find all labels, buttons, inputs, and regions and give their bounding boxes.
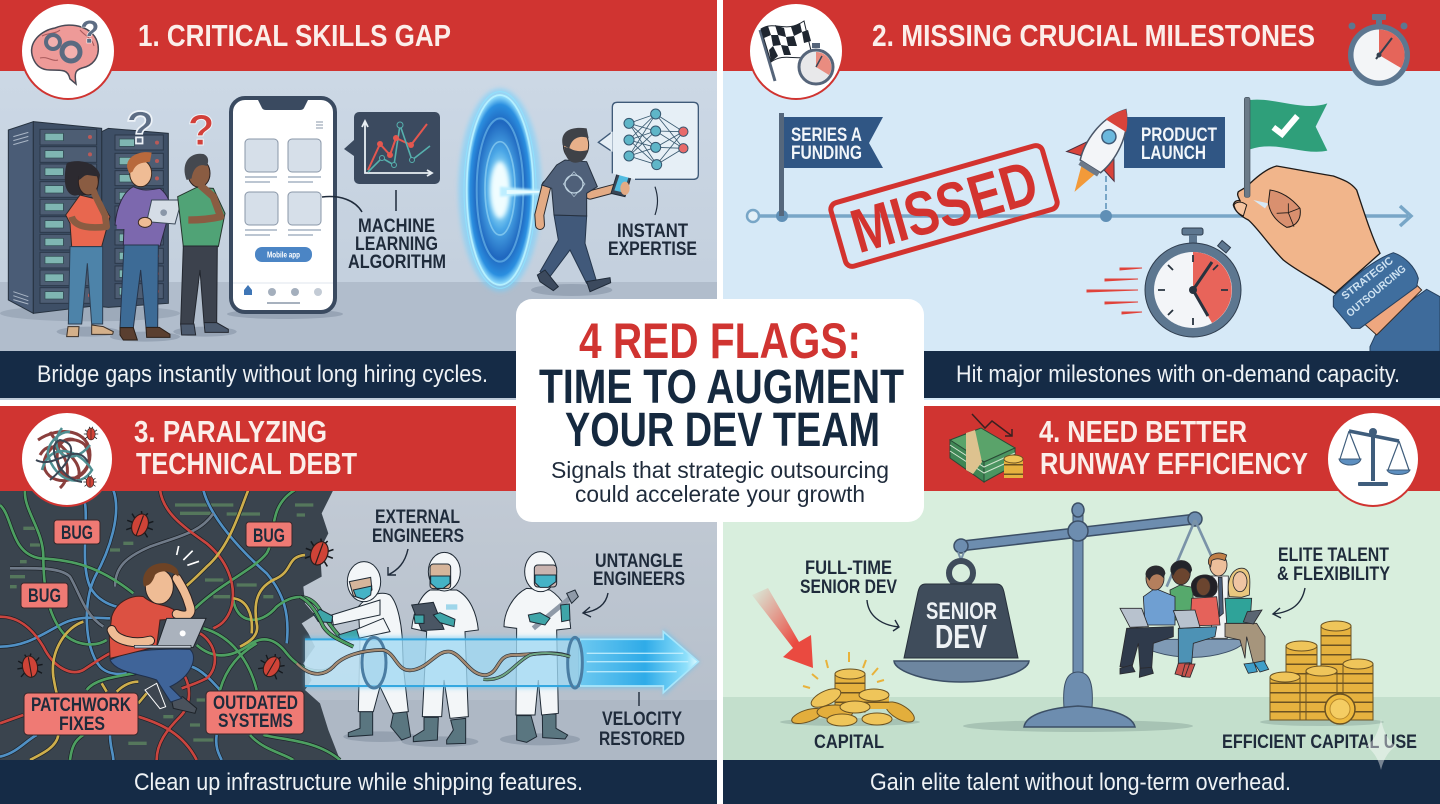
wires	[0, 490, 340, 760]
caption bar 4: Gain elite talent without long-term overhead.	[870, 769, 1291, 796]
coins: capital	[780, 652, 920, 727]
panel: runway efficiency	[723, 406, 1440, 804]
scene: racks and team	[0, 101, 237, 342]
phone mockup	[227, 98, 343, 319]
right pan with team	[1120, 520, 1269, 677]
heading 2: 2. MISSING CRUCIAL MILESTONES	[872, 18, 1315, 53]
arrow: red downward	[752, 588, 813, 668]
label: machine learning algorithm	[348, 216, 446, 273]
weight: senior dev	[894, 552, 1029, 682]
label: instant expertise	[608, 221, 697, 260]
center title card	[516, 299, 924, 522]
label: bug 1	[54, 520, 100, 544]
flag: product launch	[1124, 117, 1225, 168]
title line: red flags: 4 RED FLAGS:	[579, 313, 861, 369]
caption bar 2	[723, 351, 1440, 398]
neural network bubble	[598, 102, 698, 179]
label: bug 3: BUG	[28, 586, 61, 607]
flag: series a funding	[779, 113, 883, 216]
flag: series a funding: FUNDING	[791, 143, 862, 164]
heading 3	[134, 414, 357, 481]
caption bar 4	[723, 760, 1440, 804]
person: man in green	[173, 154, 237, 337]
flag: green check	[1250, 100, 1327, 152]
label: full-time senior dev: FULL-TIME	[805, 558, 892, 579]
label: machine learning algorithm: ALGORITHM	[348, 252, 446, 273]
heading 3: 3. PARALYZING	[134, 414, 327, 449]
arrow: untangle engineers	[583, 593, 608, 617]
label: elite talent and flexibility: & FLEXIBILITY	[1277, 564, 1390, 585]
header band 2	[723, 0, 1440, 71]
balance scale	[954, 503, 1202, 732]
label: outdated systems: OUTDATED	[213, 693, 298, 714]
label: patchwork fixes: PATCHWORK	[31, 695, 131, 716]
scene: flag and hand	[1233, 97, 1440, 351]
caption bar 1: Bridge gaps instantly without long hiring cycles.	[37, 361, 488, 388]
hand with wristband	[1233, 97, 1440, 351]
button: mobile app	[255, 247, 312, 262]
panel: paralyzing technical debt	[0, 406, 717, 804]
label: elite talent and flexibility	[1277, 545, 1390, 585]
label: external engineers: ENGINEERS	[372, 526, 464, 547]
panel: critical skills gap	[0, 0, 717, 400]
server racks	[0, 122, 180, 321]
title lines: augment dev team	[539, 361, 904, 457]
label: elite talent and flexibility: ELITE TALENT	[1278, 545, 1389, 566]
chart bubble	[344, 112, 440, 184]
label: instant expertise: INSTANT	[617, 221, 688, 242]
coins: efficient stacks	[1260, 621, 1384, 726]
person: red sweater with laptop	[1173, 575, 1220, 677]
person: woman	[57, 161, 120, 337]
arrow: external engineers	[388, 549, 408, 575]
subtitle: could accelerate your growth	[575, 481, 865, 507]
header band 1	[0, 0, 717, 71]
person: overwhelmed developer	[109, 546, 206, 713]
hazmat engineers	[313, 552, 580, 747]
person: green shirt	[1170, 561, 1194, 620]
label: bug 2	[246, 522, 292, 547]
heading 4: RUNWAY EFFICIENCY	[1040, 446, 1308, 481]
engineer 2	[412, 552, 478, 744]
caption bar 1	[0, 351, 717, 398]
portal	[458, 88, 542, 292]
subtitle: Signals that strategic outsourcing	[551, 457, 889, 483]
header band 3	[0, 406, 717, 491]
label: velocity restored: RESTORED	[599, 729, 685, 750]
stopwatch	[1145, 228, 1241, 337]
stamp: missed: MISSED	[844, 148, 1045, 267]
icon: brain with gears: ?	[80, 14, 100, 50]
heading 4	[1039, 414, 1308, 481]
label: external engineers	[372, 507, 464, 547]
title lines: augment dev team: TIME TO AUGMENT	[539, 361, 904, 414]
icon: money stack	[950, 414, 1023, 482]
arrow: to team	[1273, 588, 1305, 618]
person: walking expert	[531, 128, 632, 296]
label: full-time senior dev: SENIOR DEV	[800, 577, 897, 598]
weight: senior dev: SENIOR	[926, 598, 997, 625]
label: untangle engineers: ENGINEERS	[593, 569, 685, 590]
icon: bugs	[15, 508, 338, 682]
subtitle	[551, 457, 889, 507]
person: blonde woman with tablet	[1225, 568, 1269, 673]
header band 4	[723, 406, 1440, 491]
label: bug 2: BUG	[253, 526, 285, 547]
heading 4: 4. NEED BETTER	[1039, 414, 1247, 449]
scene: hazmat engineers and pipe	[297, 552, 700, 747]
wristband: OUTSOURCING	[1344, 263, 1409, 320]
label: velocity restored	[599, 709, 685, 750]
scene: portal and expert	[458, 88, 698, 296]
heading 1: 1. CRITICAL SKILLS GAP	[138, 18, 451, 53]
panel: missing crucial milestones	[723, 0, 1440, 400]
label: velocity restored: VELOCITY	[602, 709, 682, 730]
label: patchwork fixes: FIXES	[59, 714, 105, 735]
label: untangle engineers	[593, 551, 685, 590]
label: machine learning algorithm: MACHINE	[358, 216, 435, 237]
person: back man in shirt	[1208, 553, 1228, 638]
question mark red: ?	[188, 106, 215, 155]
wristband	[1333, 253, 1418, 328]
glowing pipe and arrow	[297, 597, 700, 697]
weight: senior dev: DEV	[935, 618, 987, 655]
person: blue shirt with laptop	[1120, 566, 1175, 677]
engineer 1	[313, 562, 411, 740]
speed lines	[1087, 268, 1142, 314]
label: outdated systems: SYSTEMS	[218, 711, 293, 732]
engineer 3	[504, 552, 578, 742]
flag: product launch: LAUNCH	[1141, 143, 1206, 164]
flag: series a funding: SERIES A	[791, 125, 862, 146]
label: machine learning algorithm: LEARNING	[355, 234, 438, 255]
arrow: to weight	[867, 600, 899, 631]
person: man with tablet	[110, 152, 182, 342]
label: outdated systems	[206, 691, 304, 734]
tangled code area	[0, 490, 340, 760]
heading 3: TECHNICAL DEBT	[136, 446, 357, 481]
label: external engineers: EXTERNAL	[375, 507, 460, 528]
icon: balance scale	[1327, 412, 1419, 506]
label: capital: CAPITAL	[814, 732, 884, 753]
wristband: STRATEGIC	[1339, 255, 1396, 302]
flag: product launch: PRODUCT	[1141, 125, 1217, 146]
caption bar 3	[0, 760, 717, 804]
icon: header stopwatch	[1348, 14, 1410, 86]
title lines: augment dev team: YOUR DEV TEAM	[565, 404, 880, 457]
icon: rocket	[1051, 95, 1150, 207]
label: bug 1: BUG	[61, 523, 93, 544]
label: patchwork fixes	[24, 693, 138, 735]
timeline	[747, 176, 1411, 226]
icon: brain with gears	[21, 3, 115, 99]
icon: tangled knot	[21, 412, 113, 506]
leader lines	[322, 190, 396, 212]
icon: checkered flag and stopwatch	[749, 3, 843, 99]
label: instant expertise: EXPERTISE	[608, 239, 697, 260]
label: untangle engineers: UNTANGLE	[595, 551, 683, 572]
button: mobile app: Mobile app	[267, 250, 300, 260]
caption bar 2: Hit major milestones with on-demand capacity.	[956, 361, 1400, 388]
label: full-time senior dev	[800, 558, 897, 598]
question mark grey: ?	[126, 101, 154, 153]
caption bar 3: Clean up infrastructure while shipping features.	[134, 769, 583, 796]
label: bug 3	[21, 583, 68, 608]
watermark sparkle	[1366, 719, 1396, 770]
